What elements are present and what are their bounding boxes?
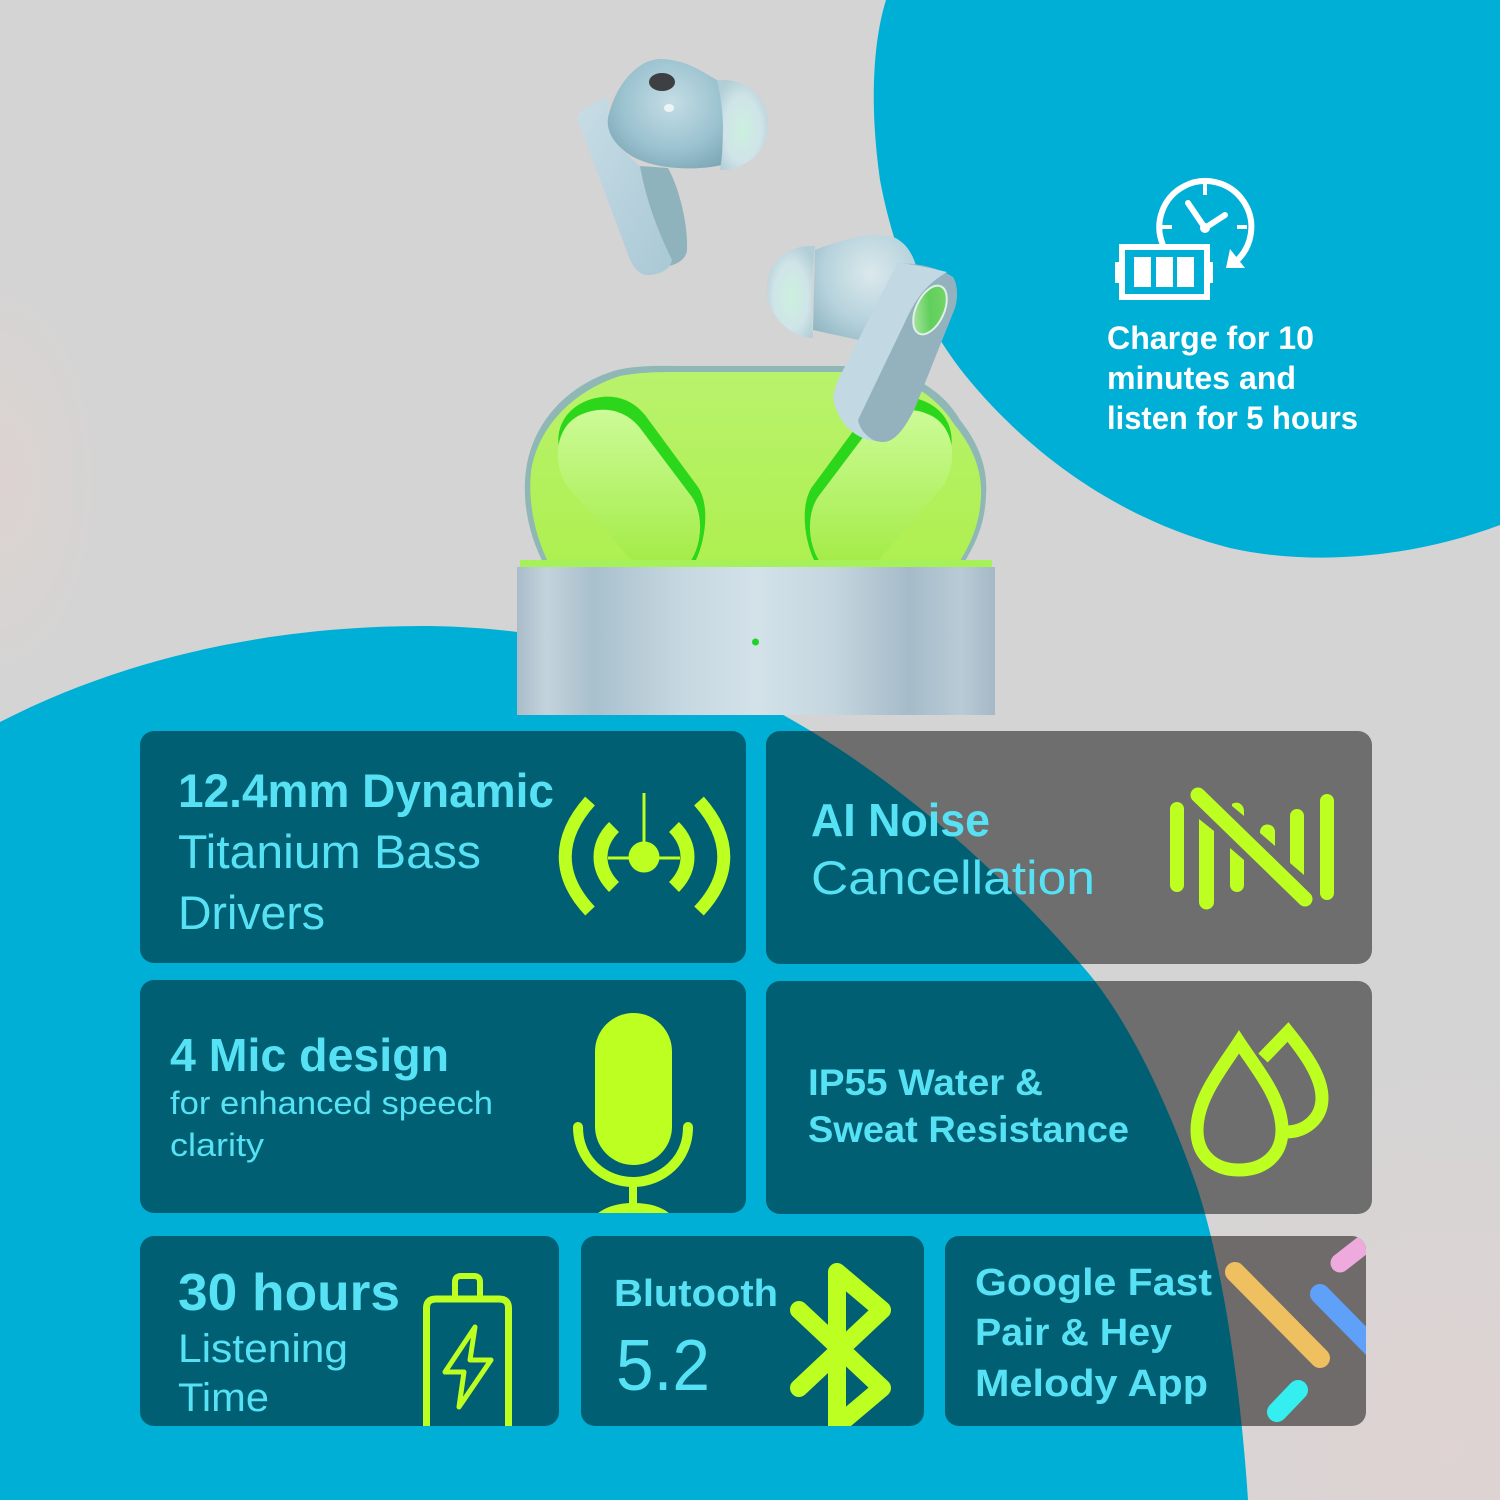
- driver text: [178, 764, 554, 939]
- charging case: [517, 366, 995, 715]
- icon: microphone: [578, 1013, 688, 1214]
- driver text: Titanium Bass: [178, 825, 481, 878]
- icon: battery bolt: [426, 1276, 508, 1430]
- driver text: 12.4mm Dynamic: [178, 764, 554, 817]
- charge text: minutes and: [1107, 360, 1296, 396]
- Google text: [975, 1262, 1212, 1405]
- noise text: [811, 794, 1095, 904]
- icon: battery with clock: [1115, 181, 1251, 297]
- listening text: Listening: [178, 1327, 348, 1371]
- blue shape: top right: [874, 0, 1500, 558]
- Google text: Melody App: [975, 1363, 1208, 1405]
- LED: [752, 638, 759, 646]
- panel: 12.4mm drivers: [140, 731, 746, 963]
- panel: AI noise cancellation: [766, 731, 1372, 964]
- panel: Google Fast Pair: [945, 1236, 1380, 1426]
- mic text: clarity: [170, 1127, 264, 1163]
- IP55 text: [808, 1062, 1129, 1150]
- panel: IP55 resistance: [766, 981, 1372, 1214]
- mic text: 4 Mic design: [170, 1029, 449, 1081]
- panel: bluetooth: [581, 1236, 924, 1426]
- Google text: Google Fast: [975, 1262, 1212, 1304]
- Google text: Pair & Hey: [975, 1312, 1172, 1354]
- listening text: 30 hours: [178, 1264, 400, 1322]
- charge text: [1107, 320, 1358, 436]
- case lid: [525, 366, 986, 566]
- earbud: lower right: [767, 235, 957, 442]
- charge text: Charge for 10: [1107, 320, 1314, 356]
- noise text: Cancellation: [811, 851, 1095, 904]
- green button: [906, 281, 954, 339]
- mic port: [649, 73, 675, 91]
- panel: 30 hours: [140, 1236, 559, 1430]
- icon: crossed sound bars: [1170, 794, 1334, 910]
- icon: colour streaks: [1235, 1238, 1380, 1412]
- IP55 text: Sweat Resistance: [808, 1109, 1129, 1150]
- case base: [517, 560, 995, 715]
- icon: bluetooth: [799, 1272, 882, 1426]
- bluetooth text: [614, 1273, 778, 1406]
- icon: water drops: [1197, 1032, 1322, 1170]
- blue shape: bottom left: [0, 626, 1248, 1500]
- quick charge callout: [1107, 181, 1358, 436]
- listening text: [178, 1264, 400, 1420]
- listening text: Time: [178, 1376, 269, 1420]
- charge text: listen for 5 hours: [1107, 400, 1358, 436]
- bluetooth text: 5.2: [616, 1326, 710, 1406]
- icon: driver waves: [565, 793, 724, 911]
- IP55 text: IP55 Water &: [808, 1062, 1043, 1103]
- noise text: AI Noise: [811, 794, 990, 846]
- mic text: [170, 1029, 493, 1163]
- mic text: for enhanced speech: [170, 1085, 493, 1121]
- driver text: Drivers: [178, 886, 325, 939]
- bluetooth text: Blutooth: [614, 1273, 778, 1315]
- earbud: upper left: [577, 59, 768, 275]
- panel: 4 mic design: [140, 980, 746, 1214]
